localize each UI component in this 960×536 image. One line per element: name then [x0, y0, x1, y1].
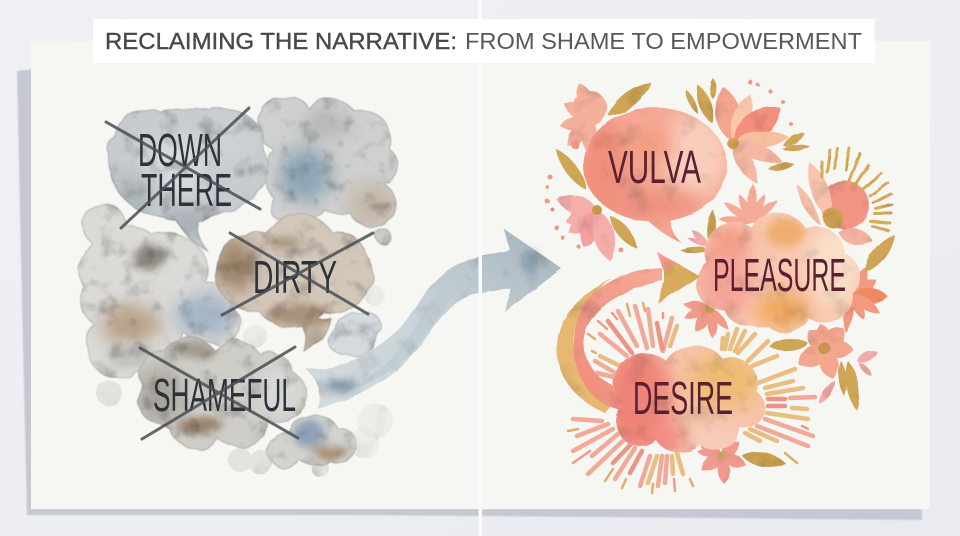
- cloud: grey and blue upper right: [256, 96, 399, 246]
- word: down: DOWN: [138, 124, 222, 176]
- pink petals and accents: [686, 227, 879, 406]
- cross-out strokes: [106, 108, 373, 439]
- flower: orange far right: [840, 264, 889, 333]
- centre divider: [478, 0, 482, 536]
- faint wash spots: [96, 286, 393, 477]
- gold and pink arrow: [557, 252, 700, 413]
- paper shadow: [17, 69, 922, 520]
- flowers and leaves: [544, 76, 900, 484]
- word: there: THERE: [141, 164, 232, 216]
- speech bubble: down there: [106, 106, 269, 252]
- grey arrow: [305, 228, 561, 408]
- title: bold part: RECLAIMING THE NARRATIVE:: [105, 28, 457, 54]
- rays of right flower: [822, 149, 892, 230]
- flower: peach top left: [559, 80, 607, 151]
- word: desire: DESIRE: [633, 372, 733, 424]
- flower: lotus top: [711, 85, 790, 187]
- flower: coral bottom: [696, 437, 748, 484]
- title banner: [93, 19, 875, 63]
- speech bubble: vulva: [583, 107, 728, 243]
- small blue cloud: [327, 311, 382, 358]
- panel: empowering words: [544, 76, 900, 493]
- cloud: grey and brown left: [77, 203, 242, 379]
- cloud: blue and brown bottom: [265, 414, 357, 470]
- gold leaves: [551, 76, 900, 471]
- word: vulva: VULVA: [608, 141, 701, 193]
- cloud: pleasure: [696, 212, 860, 334]
- berry dots: [544, 80, 793, 252]
- speech bubble: shameful: [136, 336, 308, 452]
- flower: peach right: [792, 160, 875, 250]
- flower: peach lower right: [793, 322, 853, 381]
- title: light part: FROM SHAME TO EMPOWERMENT: [465, 28, 862, 54]
- flower: pink left: [554, 190, 621, 264]
- word: shameful: SHAMEFUL: [153, 369, 296, 421]
- word: pleasure: PLEASURE: [713, 249, 846, 301]
- word: dirty: DIRTY: [253, 251, 337, 303]
- sun rays around desire: [568, 303, 815, 493]
- flower: coral below pleasure: [682, 298, 731, 339]
- speech bubble: dirty: [214, 212, 376, 352]
- flower: small fan: [718, 183, 780, 226]
- panel: shame clouds: [70, 85, 561, 477]
- cloud: desire: [612, 345, 766, 453]
